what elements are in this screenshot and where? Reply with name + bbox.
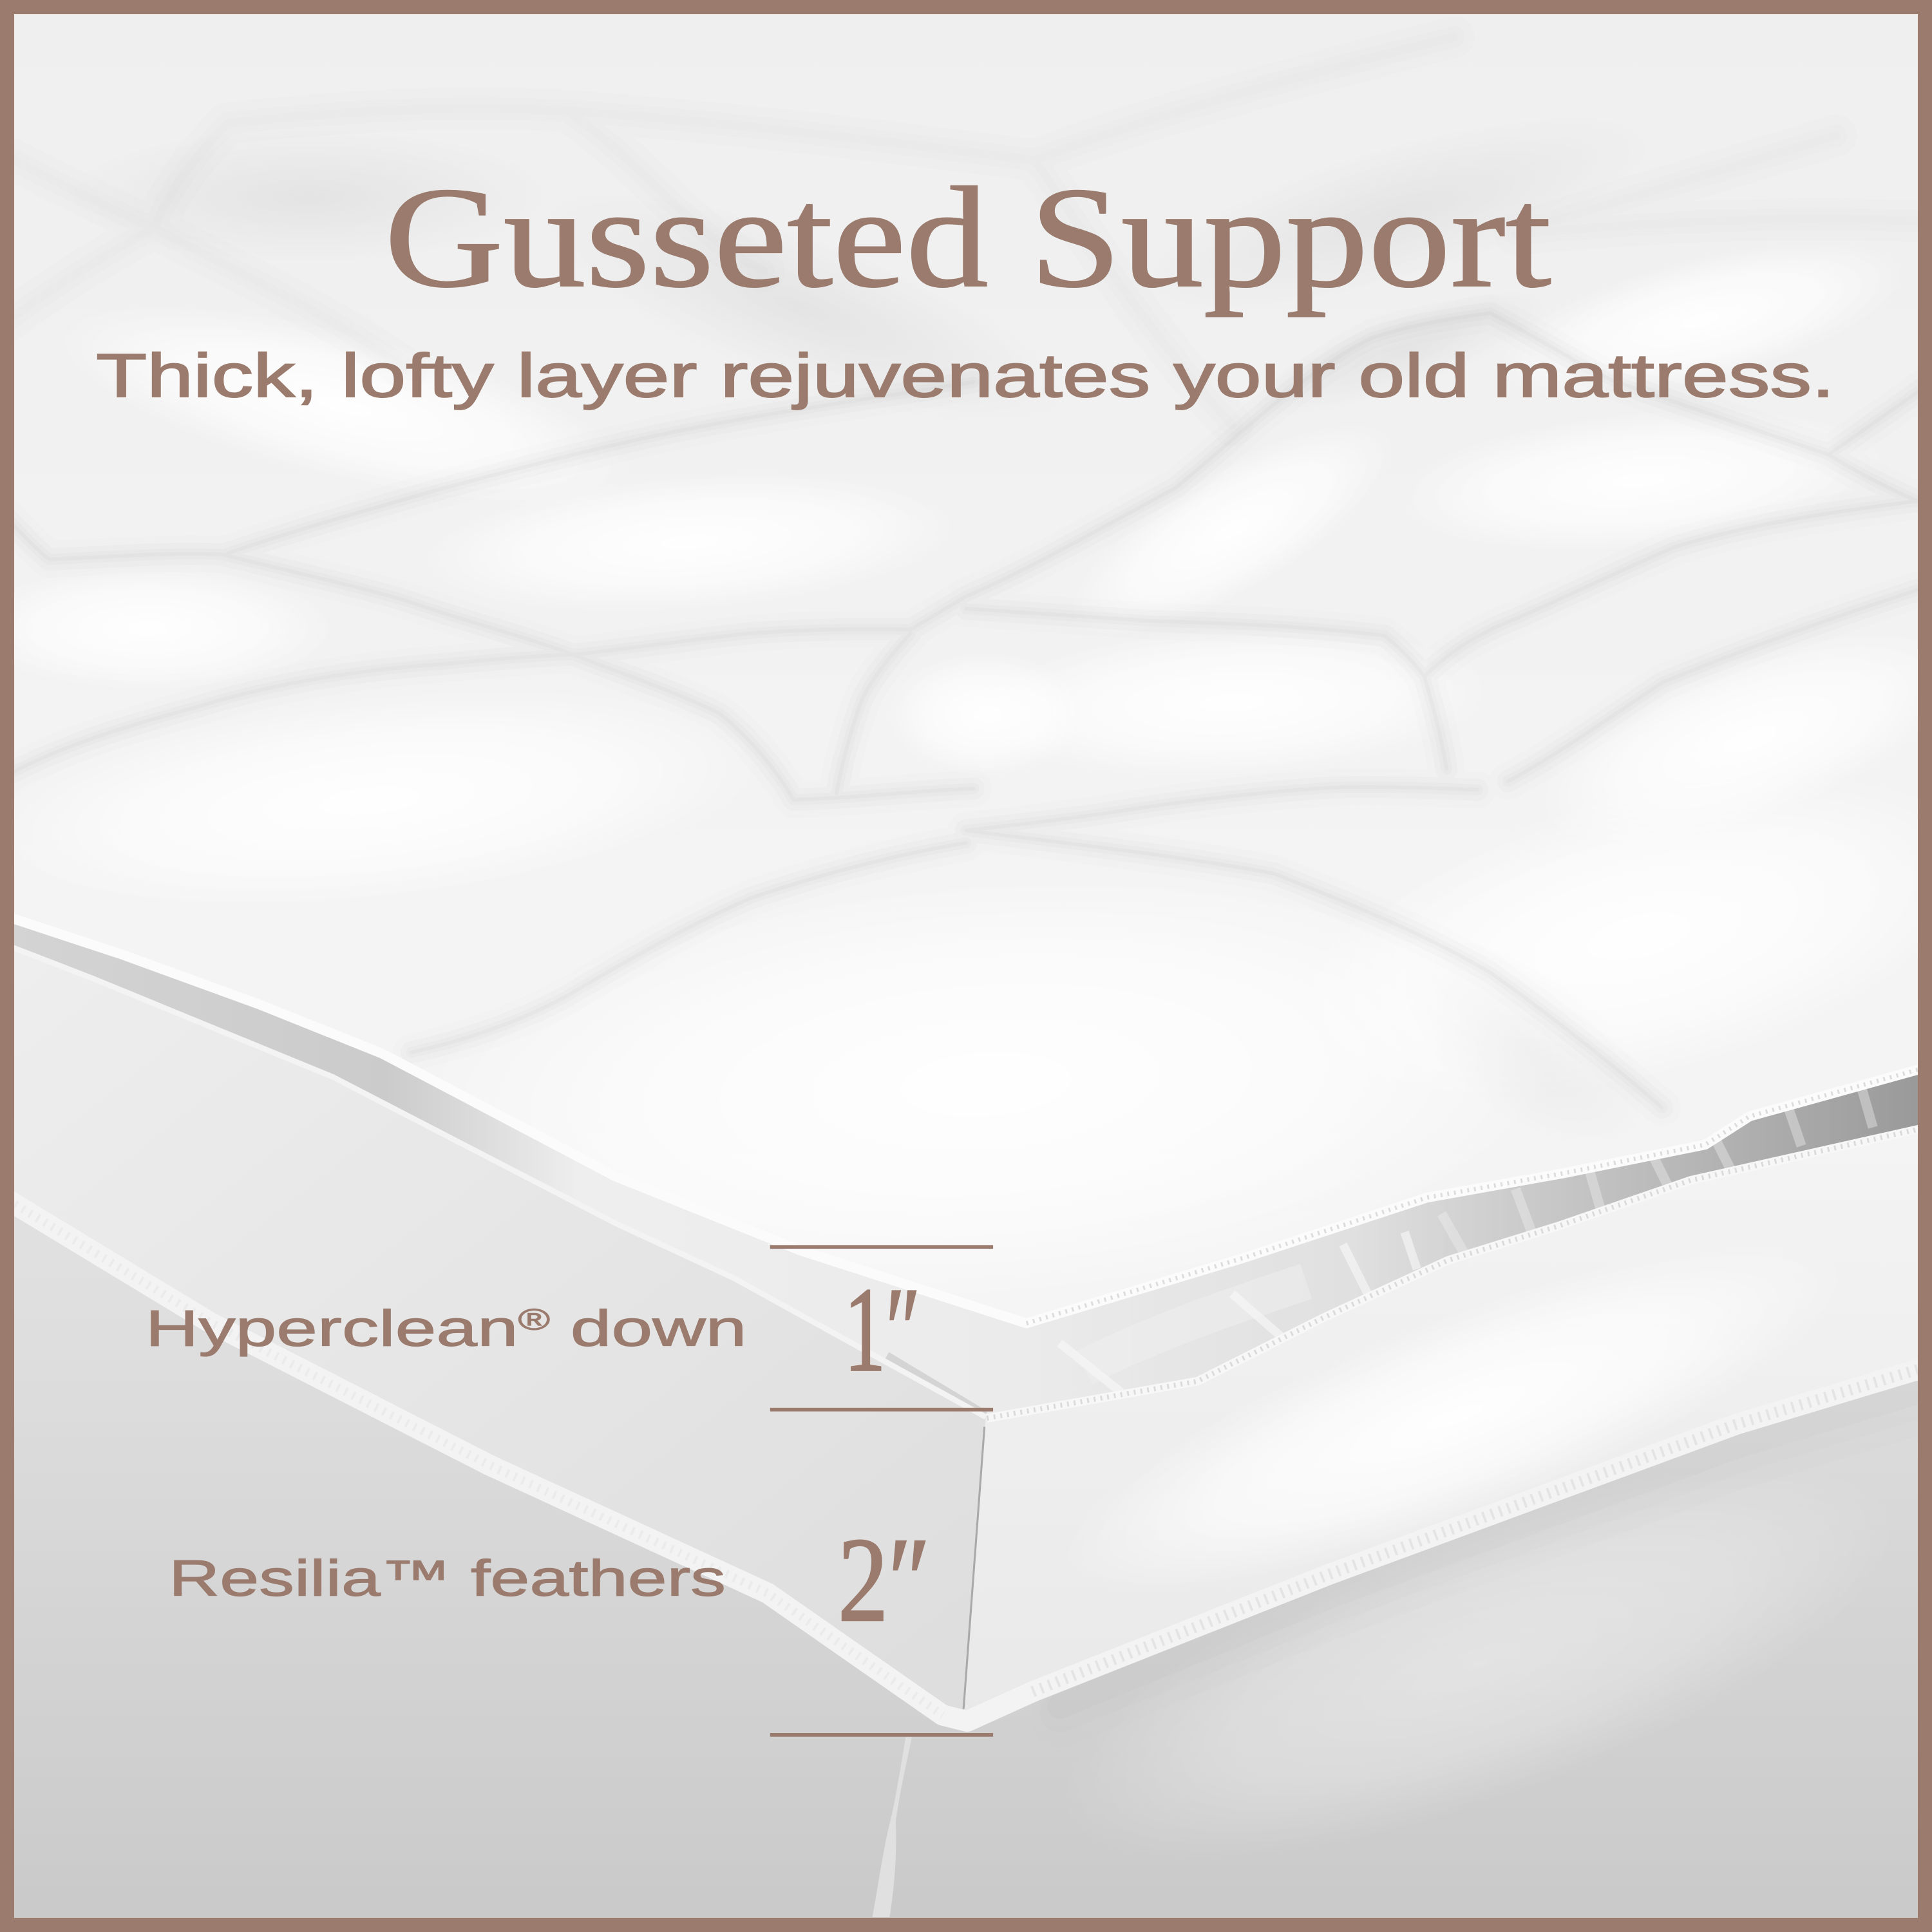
bottom piping: [0, 1195, 1932, 1721]
label: Hyperclean down: Hyperclean: [146, 1300, 401, 1356]
title: Gusseted Support: [384, 158, 1551, 317]
corner seam: [963, 1427, 985, 1709]
gap between layers: [0, 914, 1932, 1418]
lower piping right: [987, 1126, 1932, 1418]
upper gusset piping: [0, 943, 986, 1417]
label: Hyperclean down: ®: [518, 1302, 550, 1336]
label: Hyperclean down: down: [550, 1300, 746, 1356]
thickness: 2 inches: 2″: [838, 1513, 931, 1647]
gusset soft highlight: [1027, 1175, 1880, 1659]
measurement lines and labels: [146, 1245, 993, 1737]
gap folds: [887, 1084, 1873, 1414]
pillow highlights: [35, 189, 1918, 1151]
divider top: [770, 1245, 993, 1249]
gusset right face: [963, 1124, 1932, 1719]
divider middle: [770, 1408, 993, 1412]
sheet highlight right: [1016, 1385, 1932, 1932]
divider bottom: [770, 1733, 993, 1737]
broad shading: [62, 76, 1690, 1197]
mattress surface: [0, 862, 1932, 1932]
top layer piping: [0, 914, 1932, 1323]
quilted top layer: [0, 0, 1932, 1356]
thickness: 1 inch: 1″: [844, 1263, 920, 1397]
gusset left face: [0, 943, 986, 1715]
label: Resilia feathers: Resilia™ feathers: [169, 1550, 726, 1607]
quilting seams, soft layers: [14, 308, 1918, 1113]
sheet fold: [873, 1738, 912, 1917]
sheet shadow under the topper: [1059, 1387, 1932, 1719]
subtitle: Thick, lofty layer rejuvenates your old mattress.: [96, 341, 1835, 410]
